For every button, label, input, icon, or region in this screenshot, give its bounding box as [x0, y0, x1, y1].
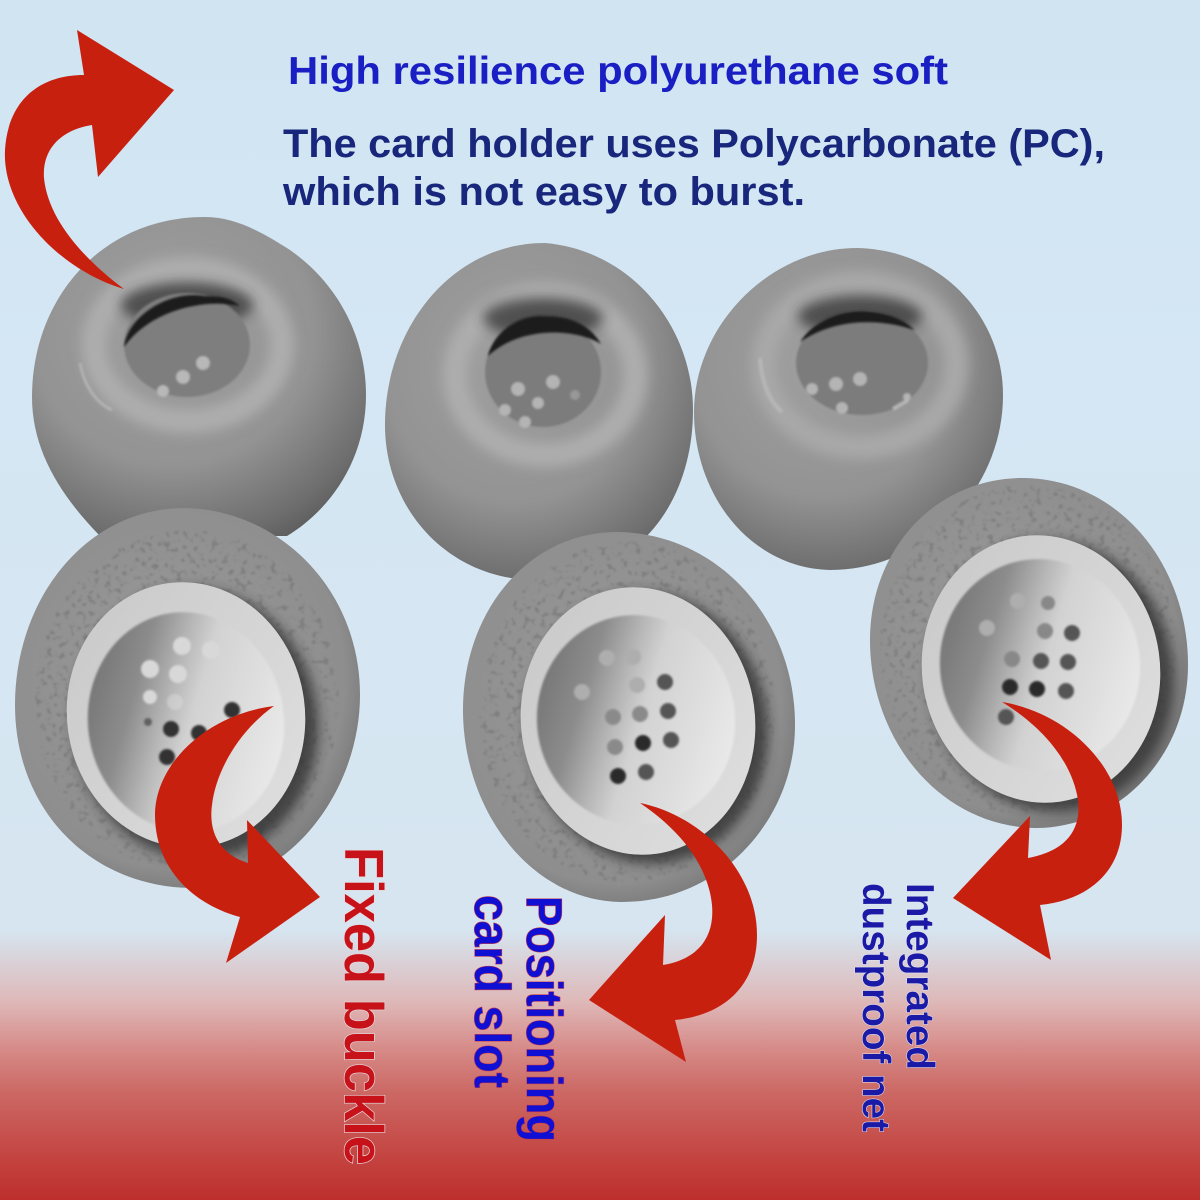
ear tip: bottom left with fixed buckle [5, 500, 370, 895]
label: integrated dustproof net [854, 883, 941, 1132]
ear tip: top right dome [694, 248, 1003, 570]
ear tip: top left dome [32, 217, 366, 536]
label: positioning card slot: Positioning [516, 896, 572, 1142]
label: integrated dustproof net: Integrated [898, 883, 941, 1070]
label: positioning card slot [464, 895, 572, 1142]
label: integrated dustproof net: dustproof net [854, 883, 897, 1132]
description text: which is not easy to burst. [282, 170, 805, 214]
description text [282, 122, 1105, 214]
ear tip: bottom right with dustproof net [860, 470, 1195, 835]
arrow: positioning card slot [589, 803, 757, 1062]
description text: The card holder uses Polycarbonate (PC), [283, 122, 1105, 166]
ear tip: bottom centre with positioning card slot [455, 525, 805, 910]
ear tip: top centre dome [385, 243, 693, 578]
arrow: integrated dustproof net [953, 702, 1122, 960]
label: fixed buckle: Fixed buckle [333, 847, 395, 1165]
heading: material: High resilience polyurethane soft [288, 50, 948, 93]
arrow: fixed buckle [155, 706, 320, 963]
arrow: pointing to top of tip [5, 30, 174, 289]
label: positioning card slot: card slot [464, 895, 520, 1088]
